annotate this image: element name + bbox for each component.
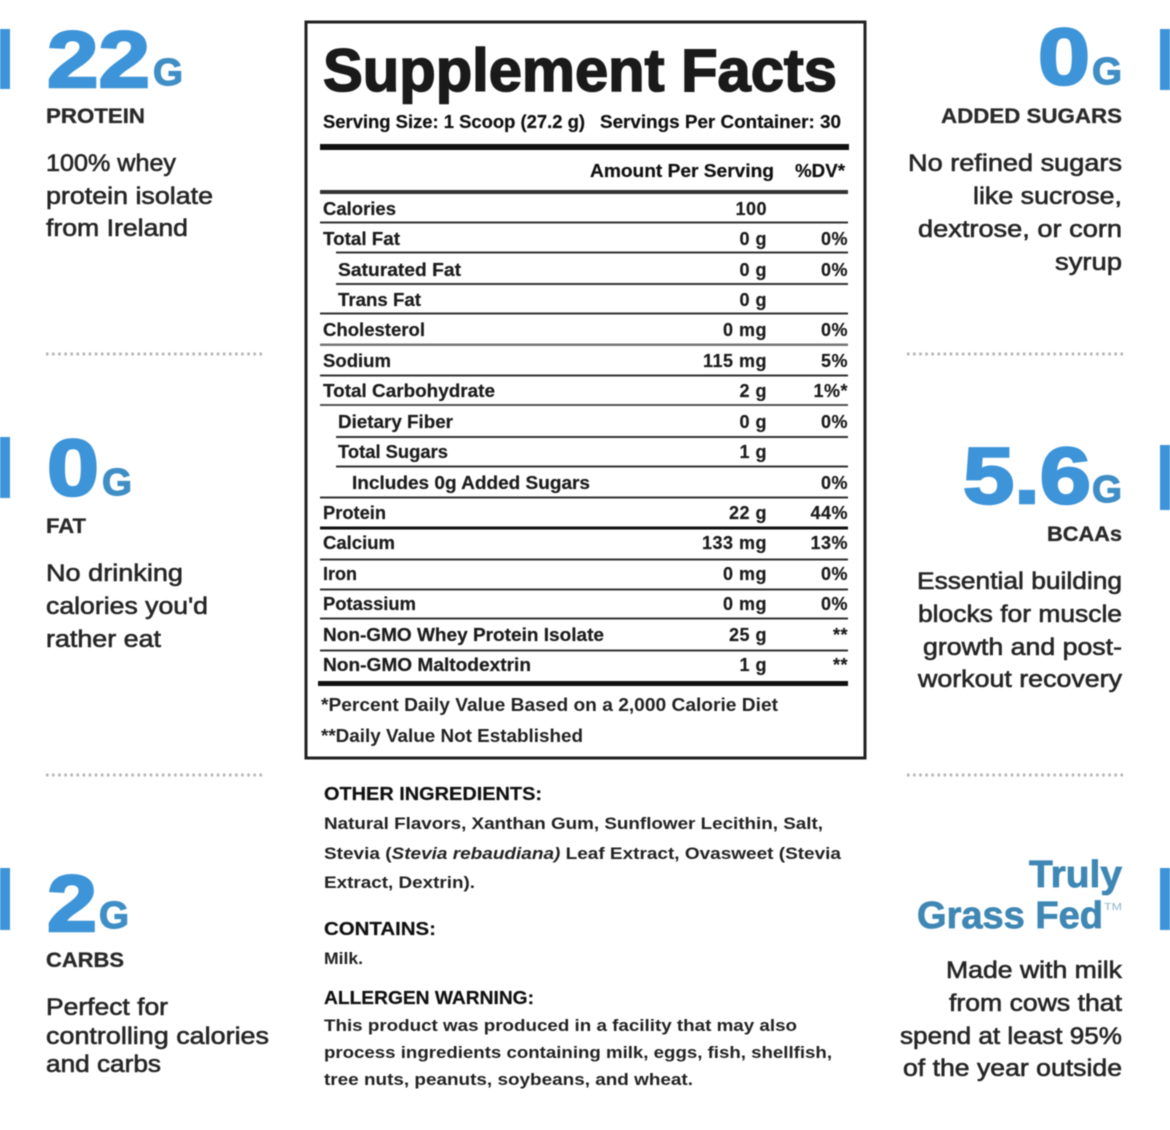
row daily values: 0% [821,229,848,249]
ingredient list [324,815,842,892]
row names: Saturated Fat [338,260,461,280]
heading: Grass Fed [917,895,1103,937]
row names [323,199,604,675]
blue bar [1160,445,1170,510]
ingredient list: Extract, Dextrin). [324,874,475,892]
stat: protein [0,15,213,242]
row amounts: 0 mg [723,594,767,614]
blue bar [0,437,10,498]
description: Made with milk [946,957,1123,984]
row amounts: 0 g [739,290,767,310]
description: of the year outside [903,1055,1122,1082]
warning text [324,1017,832,1089]
row daily values: 0% [821,594,848,614]
value: 22g [47,15,183,104]
description [46,994,269,1078]
allergen: Milk. [324,950,363,968]
value: 5.6g: 5.6 [963,431,1091,520]
value: 0g: G [102,462,132,504]
row names: Includes 0g Added Sugars [352,473,590,493]
blue bar [0,29,10,89]
row names: Calcium [323,533,395,553]
blue bar [1160,29,1170,90]
blue bar [1160,868,1170,930]
label: PROTEIN [46,105,145,128]
description: growth and post- [923,634,1122,661]
value: 5.6g [963,431,1122,520]
description: Essential building [917,568,1122,595]
row names: Calories [323,199,396,219]
row names: Sodium [323,351,391,371]
row names: Total Carbohydrate [323,381,495,401]
row amounts: 0 g [739,260,767,280]
description: No refined sugars [908,150,1122,177]
table rules [318,144,849,686]
value: 2g: 2 [47,859,97,948]
footnotes: *Percent Daily Value Based on a 2,000 Calorie Diet [321,695,778,715]
row names: Potassium [323,594,416,614]
column headers [590,161,845,181]
row names: Trans Fat [338,290,421,310]
description [46,560,208,653]
row amounts: 0 g [739,229,767,249]
stat: carbs [0,859,269,1078]
warning text: This product was produced in a facility that may also [324,1017,797,1035]
value: 22g: G [153,52,183,94]
row amounts: 133 mg [702,533,767,553]
row amounts: 100 [735,199,767,219]
row daily values: ** [833,655,848,675]
heading: TM [1104,902,1122,913]
row amounts: 1 g [739,442,767,462]
value: 2g: G [99,895,129,937]
row names: Dietary Fiber [338,412,453,432]
row daily values [810,229,848,675]
label: CARBS [46,949,124,972]
title: Supplement Facts [323,37,837,104]
allergen warning [324,988,832,1089]
heading: CONTAINS: [324,919,436,939]
ingredient list: Natural Flavors, Xanthan Gum, Sunflower Lecithin, Salt, [324,815,823,833]
panel: supplement facts [306,22,865,758]
description: No drinking [46,560,183,587]
row amounts: 22 g [729,503,767,523]
description: from cows that [949,990,1122,1017]
value: 5.6g: G [1092,469,1122,511]
row names: Total Sugars [338,442,448,462]
row daily values: 0% [821,564,848,584]
description [46,150,213,242]
row daily values: ** [833,625,848,645]
value: 22g: 22 [47,15,150,104]
description: dextrose, or corn [918,216,1122,243]
heading: ALLERGEN WARNING: [324,988,534,1008]
description: syrup [1055,249,1122,276]
row amounts: 0 mg [723,564,767,584]
warning text: process ingredients containing milk, eggs, fish, shellfish, [324,1044,832,1062]
row daily values: 13% [810,533,848,553]
other ingredients [324,784,842,892]
footnotes: **Daily Value Not Established [321,726,583,746]
value: 0g: G [1092,51,1122,93]
footnotes [321,695,778,746]
row amounts [702,199,767,675]
row daily values: 0% [821,473,848,493]
ingredient list: Stevia ( Stevia rebaudiana) Leaf Extract, Ovasweet (Stevia [324,845,842,863]
description: from Ireland [46,215,188,242]
row amounts: 1 g [739,655,767,675]
row names: Non-GMO Whey Protein Isolate [323,625,604,645]
row names: Total Fat [323,229,400,249]
description [900,957,1123,1082]
description: spend at least 95% [900,1023,1122,1050]
stat: truly grass fed [900,854,1170,1082]
value: 0g [47,423,132,512]
description: Perfect for [46,994,168,1021]
row amounts: 0 mg [723,320,767,340]
row amounts: 25 g [729,625,767,645]
stat: fat [0,423,208,653]
row names: Iron [323,564,357,584]
description [908,150,1122,276]
row daily values: 0% [821,260,848,280]
column headers: Amount Per Serving [590,161,774,181]
row amounts: 115 mg [703,351,767,371]
column headers: %DV* [795,161,845,181]
description: calories you'd [46,593,208,620]
row daily values: 0% [821,320,848,340]
serving info: Servings Per Container: 30 [600,112,841,132]
row daily values: 0% [821,412,848,432]
contains [324,919,436,968]
row amounts: 2 g [739,381,767,401]
value: 0g [1038,12,1122,101]
value: 0g: 0 [1038,12,1090,101]
description: 100% whey [46,150,176,177]
row names: Protein [323,503,386,523]
description: rather eat [46,626,161,653]
description: and carbs [46,1051,161,1078]
row amounts: 0 g [739,412,767,432]
value: 0g: 0 [47,423,99,512]
heading [917,854,1122,937]
warning text: tree nuts, peanuts, soybeans, and wheat. [324,1071,693,1089]
description: protein isolate [46,183,213,210]
description: like sucrose, [973,183,1122,210]
row names: Non-GMO Maltodextrin [323,655,531,675]
stat: BCAAs [917,431,1170,693]
heading: Truly [1029,854,1122,896]
row daily values: 5% [821,351,848,371]
row daily values: 44% [810,503,848,523]
row names: Cholesterol [323,320,425,340]
stat: added sugars [908,12,1170,276]
serving info: Serving Size: 1 Scoop (27.2 g) [323,112,585,132]
description: blocks for muscle [918,601,1122,628]
blue bar [0,868,10,930]
description: controlling calories [46,1023,269,1050]
description [917,568,1122,693]
heading: OTHER INGREDIENTS: [324,784,542,804]
label: ADDED SUGARS [941,105,1122,128]
description: workout recovery [917,666,1122,693]
label: BCAAs [1047,523,1122,546]
serving info [323,112,841,132]
label: FAT [46,515,86,538]
value: 2g [47,859,129,948]
row daily values: 1%* [813,381,848,401]
